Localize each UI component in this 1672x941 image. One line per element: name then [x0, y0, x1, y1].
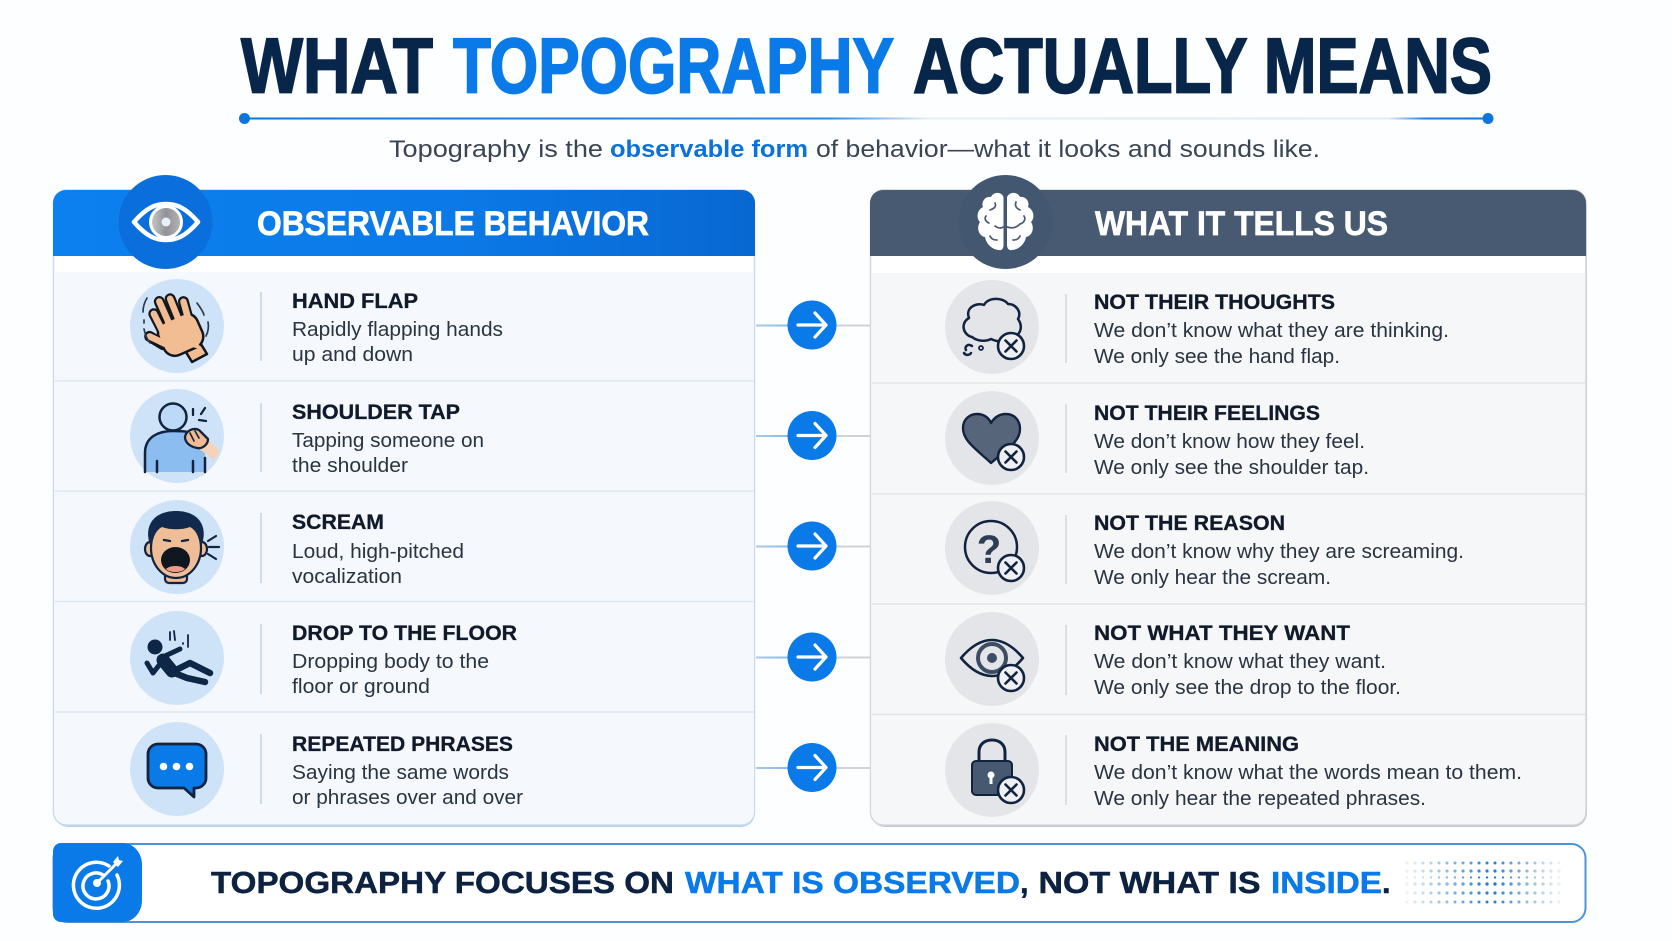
callout: key takeaway banner [53, 843, 1586, 922]
row: not their feelings [945, 391, 1369, 485]
text: banner statement: WHAT IS OBSERVED [685, 865, 1020, 900]
text: hand flap: up and down [292, 343, 413, 366]
text: not what they want: We don’t know what they want. [1094, 650, 1386, 673]
row: not the meaning [945, 723, 1522, 817]
text: shoulder tap [292, 401, 484, 477]
text: not the reason [1094, 512, 1464, 589]
icon: target with arrow [53, 843, 142, 922]
row: not the reason [945, 501, 1464, 595]
subtitle: observable form [610, 136, 808, 163]
header bar: what it tells us [870, 175, 1586, 269]
text: drop to the floor [292, 622, 517, 698]
arrow: row 4 [756, 632, 870, 682]
title: WHAT [241, 22, 433, 110]
text: not their thoughts: We don’t know what they are thinking. [1094, 319, 1449, 342]
text: not what they want: NOT WHAT THEY WANT [1094, 622, 1350, 645]
row: not their thoughts [945, 280, 1449, 374]
text: not their thoughts: NOT THEIR THOUGHTS [1094, 291, 1335, 314]
icon: padlock with x [945, 723, 1039, 817]
text: not the meaning: NOT THE MEANING [1094, 733, 1299, 756]
panel: observable behavior [53, 175, 755, 827]
dot pattern [1407, 863, 1562, 902]
row: repeated phrases [130, 722, 523, 816]
title [241, 22, 1492, 110]
icon: eye [134, 204, 198, 240]
panel body: what it tells us [870, 190, 1587, 827]
panel body: observable behavior [54, 190, 755, 827]
row: drop to the floor [130, 611, 517, 705]
text: repeated phrases: or phrases over and over [292, 786, 523, 809]
text: drop to the floor: DROP TO THE FLOOR [292, 622, 517, 645]
text: not their feelings: NOT THEIR FEELINGS [1094, 402, 1320, 425]
text: not their feelings [1094, 402, 1369, 479]
panel: what it tells us [870, 175, 1587, 827]
text: hand flap: Rapidly flapping hands [292, 318, 503, 341]
text: not what they want [1094, 622, 1401, 699]
text: repeated phrases: REPEATED PHRASES [292, 733, 513, 756]
text: not their thoughts [1094, 291, 1449, 368]
icon: heart with x [945, 391, 1039, 485]
text: shoulder tap: SHOULDER TAP [292, 401, 460, 424]
text: scream: SCREAM [292, 511, 384, 534]
row: shoulder tap [130, 389, 484, 483]
subtitle: Topography is the [389, 136, 603, 163]
icon: falling person [130, 611, 224, 705]
row: hand flap [130, 279, 503, 373]
text: banner statement: , [1020, 865, 1029, 900]
text: not their thoughts: We only see the hand flap. [1094, 345, 1340, 368]
text: not the reason: We don’t know why they are screaming. [1094, 540, 1464, 563]
text: not what they want: We only see the drop to the floor. [1094, 676, 1401, 699]
title: TOPOGRAPHY [453, 22, 894, 110]
text: hand flap [292, 290, 503, 366]
text: not the meaning [1094, 733, 1522, 810]
row: not what they want [945, 612, 1401, 706]
icon: brain [978, 193, 1033, 250]
arrow: row 1 [756, 300, 870, 350]
subtitle [389, 136, 1320, 163]
text: banner statement: INSIDE [1271, 865, 1382, 900]
text: not the meaning: We only hear the repeated phrases. [1094, 787, 1426, 810]
text: scream [292, 511, 464, 588]
text: banner statement [211, 865, 1391, 900]
icon: eye with x [945, 612, 1039, 706]
icon: screaming face [130, 500, 224, 594]
icon: thought cloud with x [945, 280, 1039, 374]
arrow: row 5 [756, 743, 870, 792]
title: ACTUALLY MEANS [913, 22, 1492, 110]
text: repeated phrases [292, 733, 523, 809]
text: not the reason: NOT THE REASON [1094, 512, 1285, 535]
title underline [239, 113, 1494, 124]
text: scream: vocalization [292, 565, 402, 588]
icon: question mark with x [945, 501, 1039, 595]
header bar: observable behavior: OBSERVABLE BEHAVIOR [257, 205, 649, 243]
text: not the reason: We only hear the scream. [1094, 566, 1331, 589]
text: not their feelings: We only see the shoulder tap. [1094, 456, 1369, 479]
icon: shoulder tap [130, 389, 224, 483]
text: repeated phrases: Saying the same words [292, 761, 509, 784]
text: shoulder tap: Tapping someone on [292, 429, 484, 452]
text: banner statement: . [1382, 865, 1391, 900]
header bar: observable behavior [53, 175, 755, 269]
arrow: row 3 [756, 522, 870, 570]
arrow: row 2 [756, 411, 870, 460]
subtitle: of behavior—what it looks and sounds like. [816, 136, 1320, 163]
header bar: what it tells us: WHAT IT TELLS US [1095, 205, 1388, 243]
icon: waving hand [130, 279, 224, 373]
text: not their feelings: We don’t know how they feel. [1094, 430, 1365, 453]
text: banner statement: TOPOGRAPHY FOCUSES ON [211, 865, 674, 900]
text: drop to the floor: Dropping body to the [292, 650, 489, 673]
text: drop to the floor: floor or ground [292, 675, 430, 698]
text: scream: Loud, high-pitched [292, 540, 464, 563]
text: shoulder tap: the shoulder [292, 454, 408, 477]
icon: speech bubble [130, 722, 224, 816]
row: scream [130, 500, 464, 594]
text: banner statement: NOT WHAT IS [1038, 865, 1260, 900]
text: not the meaning: We don’t know what the words mean to them. [1094, 761, 1522, 784]
icon: question mark with x: ? [977, 528, 1001, 572]
text: hand flap: HAND FLAP [292, 290, 418, 313]
